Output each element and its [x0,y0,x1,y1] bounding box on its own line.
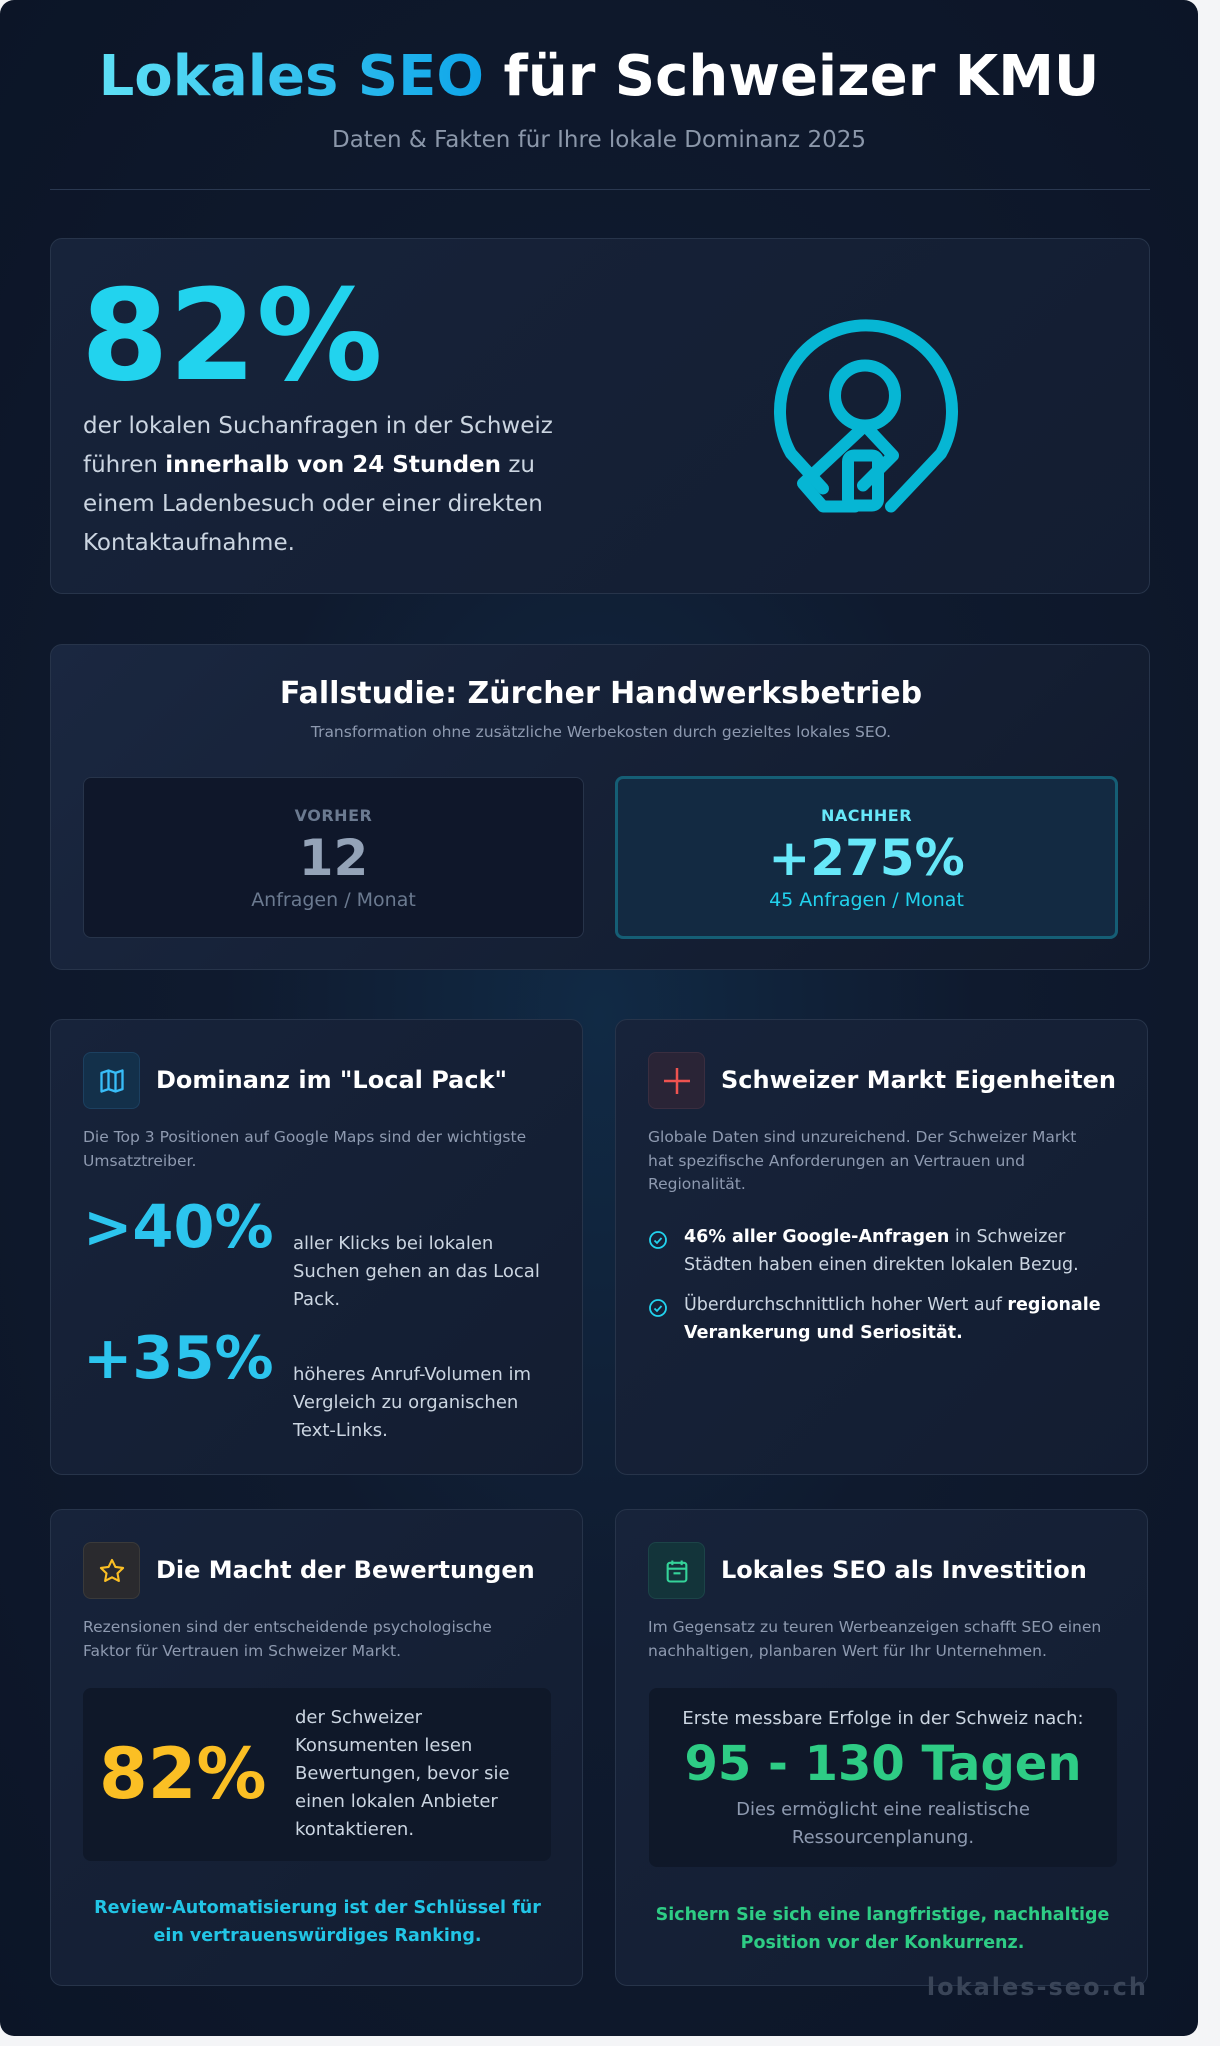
stat box days: Dies ermöglicht eine realistische Ressourcenplanung. [736,1799,1030,1848]
title: Lokales SEO für Schweizer KMU [99,44,1099,109]
heading: Die Macht der Bewertungen [156,1556,535,1584]
bullet 1: 46% aller Google-Anfragen in Schweizer Städten haben einen direkten lokalen Bezug. [684,1227,1079,1275]
stat box 82% [83,1688,551,1861]
stat +35%: höheres Anruf-Volumen im Vergleich zu organischen Text-Links. [293,1364,531,1441]
panel: swiss market [615,1019,1148,1475]
heading: Dominanz im "Local Pack" [156,1066,507,1094]
icon: map [83,1052,140,1109]
case study subtitle: Transformation ohne zusätzliche Werbekosten durch gezieltes lokales SEO. [311,723,891,741]
callout: Sichern Sie sich eine langfristige, nachhaltige Position vor der Konkurrenz. [656,1905,1109,1953]
big number 82%: 82% [81,262,383,409]
stat box days: 95 - 130 Tagen [684,1736,1082,1792]
stat +35%: +35% [83,1323,274,1392]
callout: Review-Automatisierung ist der Schlüssel für ein vertrauenswürdiges Ranking. [94,1898,541,1946]
stat box 82%: der Schweizer Konsumenten lesen Bewertungen, bevor sie einen lokalen Anbieter kontaktieren. [295,1707,510,1840]
watermark: lokales-seo.ch [927,1973,1148,2001]
icon: swiss cross [648,1052,705,1109]
icon: map pin with hand [774,319,958,512]
case study heading: Fallstudie: Zürcher Handwerksbetrieb [280,676,922,711]
stat box 82%: 82% [99,1733,267,1815]
box: vorher: Anfragen / Monat [251,889,416,911]
panel: case study [50,644,1150,970]
description: Im Gegensatz zu teuren Werbeanzeigen schafft SEO einen nachhaltigen, planbaren Wert für Ihr Unternehmen. [648,1618,1101,1660]
icon: star [83,1542,140,1599]
description: Globale Daten sind unzureichend. Der Schweizer Markt hat spezifische Anforderungen an Vertrauen und Regionalität. [648,1128,1076,1193]
panel: investment [615,1509,1148,1986]
stat box days: Erste messbare Erfolge in der Schweiz nach: [682,1708,1084,1729]
stat >40%: >40% [83,1192,274,1261]
stat >40%: aller Klicks bei lokalen Suchen gehen an das Local Pack. [293,1233,540,1310]
description: Die Top 3 Positionen auf Google Maps sind der wichtigste Umsatztreiber. [83,1128,526,1170]
stat box days [649,1688,1117,1867]
box: nachher: NACHHER [821,806,912,825]
box: vorher: 12 [299,829,368,887]
box: vorher: VORHER [295,806,372,825]
box: nachher: 45 Anfragen / Monat [769,889,964,911]
stat +35% [83,1323,531,1441]
heading: Schweizer Markt Eigenheiten [721,1066,1116,1094]
bullet 2: Überdurchschnittlich hoher Wert auf regionale Verankerung und Seriosität. [684,1295,1101,1343]
stat >40% [83,1192,540,1310]
hero text: der lokalen Suchanfragen in der Schweiz führen innerhalb von 24 Stunden zu einem Ladenbesuch oder einer direkten Kontaktaufnahme. [83,413,553,556]
heading: Lokales SEO als Investition [721,1556,1087,1584]
description: Rezensionen sind der entscheidende psychologische Faktor für Vertrauen im Schweizer Markt. [83,1618,492,1660]
panel: local pack [50,1019,583,1475]
icon: calendar [648,1542,705,1599]
box: nachher: +275% [768,829,965,887]
box: nachher [615,776,1118,939]
panel: hero stat [50,238,1150,594]
subtitle: Daten & Fakten für Ihre lokale Dominanz 2025 [332,127,866,153]
box: vorher [83,777,584,938]
panel: reviews [50,1509,583,1986]
